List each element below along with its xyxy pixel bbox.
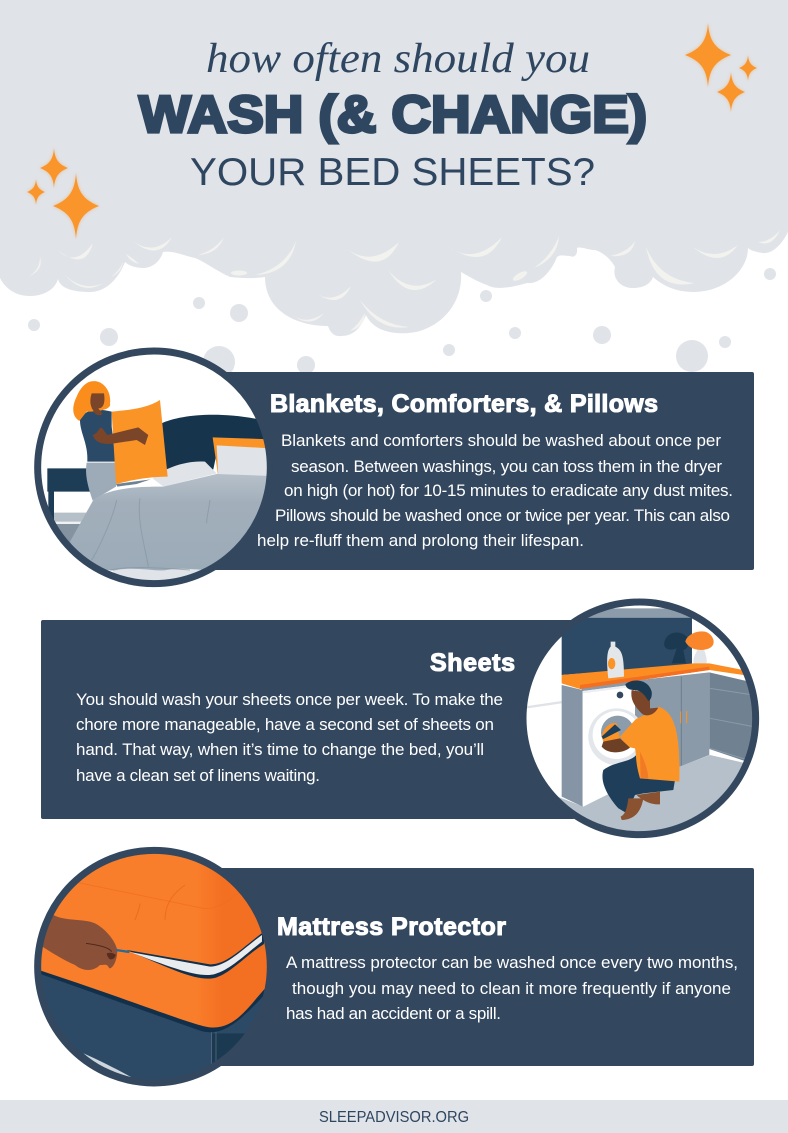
header cloud	[0, 0, 788, 336]
text: mattress protector: has had an accident or a spill.	[286, 1004, 501, 1023]
mattress	[37, 847, 270, 1027]
hand	[40, 915, 117, 970]
text: blankets: Blankets and comforters should be washed about once per	[281, 431, 721, 450]
plant	[664, 633, 689, 663]
panel: blankets	[200, 372, 754, 570]
floor	[558, 755, 743, 832]
text: sheets: hand. That way, when it’s time to change the bed, you’ll	[76, 740, 484, 759]
text: sheets: You should wash your sheets once per week. To make the	[76, 690, 503, 709]
illustration: man at washing machine	[523, 602, 757, 835]
counter	[562, 663, 743, 689]
title light line: YOUR BED SHEETS?	[190, 151, 595, 194]
text: mattress protector	[286, 953, 738, 1023]
middle pillow	[153, 461, 217, 487]
washer side	[562, 685, 583, 807]
text: sheets	[76, 690, 503, 785]
orange pillow	[112, 400, 168, 484]
arm and hand	[602, 738, 630, 752]
zipper band	[127, 932, 264, 979]
side wall line	[527, 701, 562, 708]
box spring shade	[212, 1034, 244, 1063]
bottle	[607, 642, 624, 678]
text: mattress protector: though you may need to clean it more frequently if anyone	[292, 979, 731, 998]
soap bubbles	[28, 268, 776, 378]
text: sheets: have a clean set of linens waiting.	[76, 766, 320, 785]
trousers	[602, 752, 675, 813]
title bold line: WASH (& CHANGE)	[139, 86, 647, 144]
heading: blankets: Blankets, Comforters, & Pillows	[270, 390, 658, 418]
headboard	[162, 414, 264, 470]
bench	[47, 468, 93, 522]
text: blankets: season. Between washings, you can toss them in the dryer	[291, 457, 722, 476]
text: blankets: Pillows should be washed once or twice per year. This can also	[275, 506, 730, 525]
illustration: mattress zipper	[37, 847, 270, 1083]
panel: mattress protector	[200, 868, 754, 1066]
feet	[637, 792, 660, 804]
illustration: woman making bed	[38, 351, 270, 584]
pants	[86, 463, 117, 501]
highlight	[83, 1053, 132, 1077]
title	[139, 36, 647, 194]
zipper pull	[116, 950, 129, 952]
heading: sheets: Sheets	[430, 649, 515, 677]
cloud highlights	[28, 230, 780, 331]
folds	[92, 498, 210, 570]
text: blankets: on high (or hot) for 10-15 minutes to eradicate any dust mites.	[284, 481, 733, 500]
text: blankets: help re-fluff them and prolong their lifespan.	[257, 531, 584, 550]
floor	[54, 512, 86, 522]
footer	[0, 1100, 788, 1133]
text: mattress protector: A mattress protector can be washed once every two months,	[286, 953, 738, 972]
wall	[562, 618, 692, 675]
panel: sheets	[41, 620, 575, 819]
footer url: SLEEPADVISOR.ORG	[319, 1109, 469, 1126]
sparkles top right	[685, 23, 757, 112]
text: sheets: chore more manageable, have a second set of sheets on	[76, 715, 494, 734]
duvet	[70, 474, 270, 571]
cabinet	[581, 672, 710, 767]
top edge crease	[78, 882, 204, 908]
arm	[93, 427, 148, 445]
woman	[80, 410, 116, 462]
washer	[583, 684, 635, 805]
mattress shadow	[41, 971, 264, 1032]
right cabinet	[709, 672, 752, 761]
back pillow	[212, 437, 266, 474]
sparkles left	[27, 148, 99, 239]
head	[631, 690, 658, 715]
shirt	[620, 707, 679, 782]
title script line: how often should you	[206, 36, 590, 82]
heading: mattress protector: Mattress Protector	[277, 913, 506, 941]
flowers and vase	[693, 650, 707, 664]
text: blankets	[257, 431, 733, 550]
